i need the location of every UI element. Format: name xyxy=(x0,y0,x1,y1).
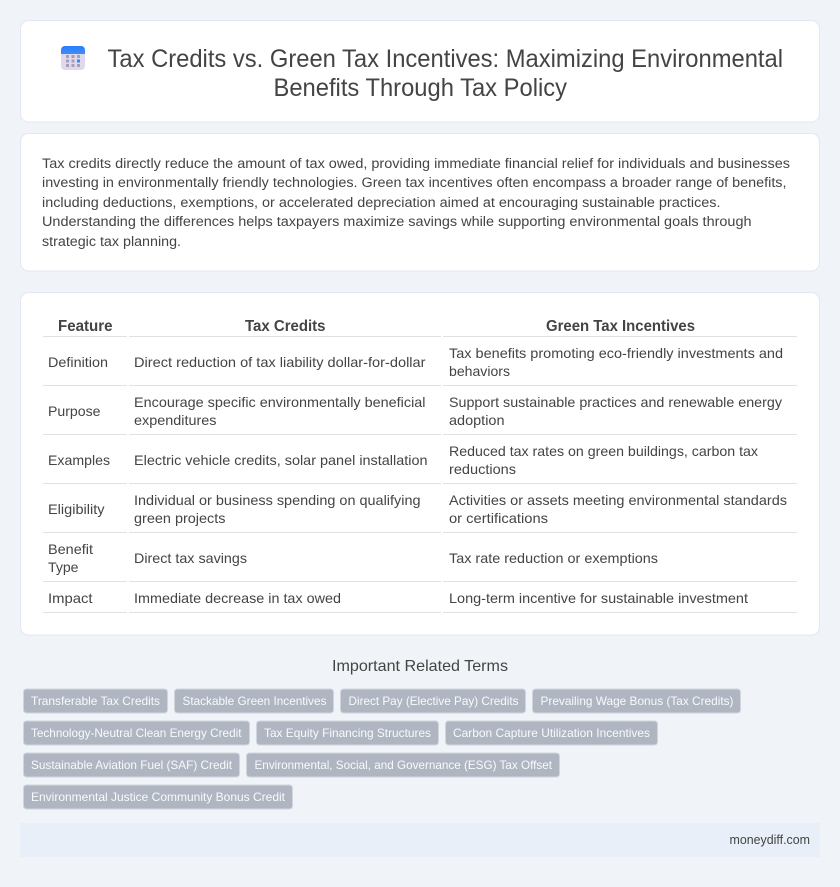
icon: calendar xyxy=(61,46,85,70)
text block: introduction paragraph: strategic tax planning. xyxy=(42,234,181,250)
row: impact xyxy=(48,591,748,606)
row: purpose: Support sustainable practices and renewable energy xyxy=(449,395,782,410)
table header row: Feature xyxy=(58,318,113,335)
row: eligibility xyxy=(48,493,787,526)
tag: Prevailing Wage Bonus (Tax Credits) xyxy=(540,694,734,708)
row: eligibility: Eligibility xyxy=(48,502,105,517)
tag xyxy=(446,721,658,745)
row: definition: behaviors xyxy=(449,364,510,379)
table header row xyxy=(58,318,695,335)
row: eligibility: Activities or assets meeting environmental standards xyxy=(449,493,787,508)
row: definition: Definition xyxy=(48,355,108,370)
tag xyxy=(24,689,168,713)
row: benefit type: Benefit xyxy=(48,542,93,557)
tag: Tax Equity Financing Structures xyxy=(264,726,431,740)
panel: related term tags xyxy=(24,689,740,809)
row: impact: Immediate decrease in tax owed xyxy=(134,591,341,606)
title: Tax Credits vs. Green Tax Incentives: Maximizing Environmental xyxy=(108,45,783,73)
row: examples xyxy=(48,444,758,477)
tag xyxy=(24,785,292,809)
tag xyxy=(532,689,740,713)
row: definition: Direct reduction of tax liability dollar-for-dollar xyxy=(134,355,426,370)
row: examples: Reduced tax rates on green buildings, carbon tax xyxy=(449,444,758,459)
panel: header xyxy=(20,20,820,122)
row: examples: reductions xyxy=(449,462,516,477)
tag xyxy=(24,721,250,745)
table rules xyxy=(43,336,797,613)
panel: comparison table xyxy=(20,292,820,635)
row: purpose: Purpose xyxy=(48,404,101,419)
row: purpose: expenditures xyxy=(134,413,217,428)
row: impact: Long-term incentive for sustainable investment xyxy=(449,591,748,606)
panel: introduction xyxy=(20,134,820,271)
row: examples: Electric vehicle credits, solar panel installation xyxy=(134,453,428,468)
row: eligibility: or certifications xyxy=(449,511,548,526)
tag: Technology-Neutral Clean Energy Credit xyxy=(31,726,242,740)
tag xyxy=(24,753,240,777)
row: benefit type: Tax rate reduction or exemptions xyxy=(449,551,658,566)
row: benefit type xyxy=(48,542,658,575)
heading: important related terms: Important Related Terms xyxy=(332,658,508,675)
row: eligibility: green projects xyxy=(134,511,226,526)
row: definition xyxy=(48,346,783,379)
tag: Transferable Tax Credits xyxy=(31,694,160,708)
row: benefit type: Type xyxy=(48,560,79,575)
text block: introduction paragraph xyxy=(42,156,790,250)
tag: Carbon Capture Utilization Incentives xyxy=(453,726,650,740)
tag xyxy=(246,753,560,777)
table header row: Tax Credits xyxy=(245,318,326,335)
row: purpose: adoption xyxy=(449,413,504,428)
title xyxy=(108,45,783,102)
tag xyxy=(256,721,438,745)
row: definition: Tax benefits promoting eco-friendly investments and xyxy=(449,346,783,361)
row: purpose: Encourage specific environmentally beneficial xyxy=(134,395,426,410)
text block: introduction paragraph: Understanding the differences helps taxpayers maximize savings while supporting environmental goals through xyxy=(42,214,752,230)
tag xyxy=(340,689,526,713)
tag: Sustainable Aviation Fuel (SAF) Credit xyxy=(31,758,233,772)
row: benefit type: Direct tax savings xyxy=(134,551,247,566)
row: eligibility: Individual or business spending on qualifying xyxy=(134,493,420,508)
text block: introduction paragraph: investing in environmentally friendly technologies. Green tax incentives often encompass a broader range of benefits, xyxy=(42,175,786,191)
footer xyxy=(20,823,820,857)
tag xyxy=(174,689,334,713)
title: Benefits Through Tax Policy xyxy=(274,74,567,102)
text block: introduction paragraph: Tax credits directly reduce the amount of tax owed, providing immediate financial relief for individuals and businesses xyxy=(42,156,790,172)
row: examples: Examples xyxy=(48,453,110,468)
tag: Stackable Green Incentives xyxy=(182,694,326,708)
tag: Environmental, Social, and Governance (ESG) Tax Offset xyxy=(254,758,553,772)
row: impact: Impact xyxy=(48,591,93,606)
tag: Environmental Justice Community Bonus Credit xyxy=(31,790,286,804)
tag: Direct Pay (Elective Pay) Credits xyxy=(348,694,518,708)
row: purpose xyxy=(48,395,782,428)
text block: introduction paragraph: including deductions, exemptions, or accelerated depreciation aimed at encouraging sustainable practices. xyxy=(42,195,720,211)
table header row: Green Tax Incentives xyxy=(546,318,695,335)
footer source text: moneydiff.com xyxy=(730,832,810,847)
